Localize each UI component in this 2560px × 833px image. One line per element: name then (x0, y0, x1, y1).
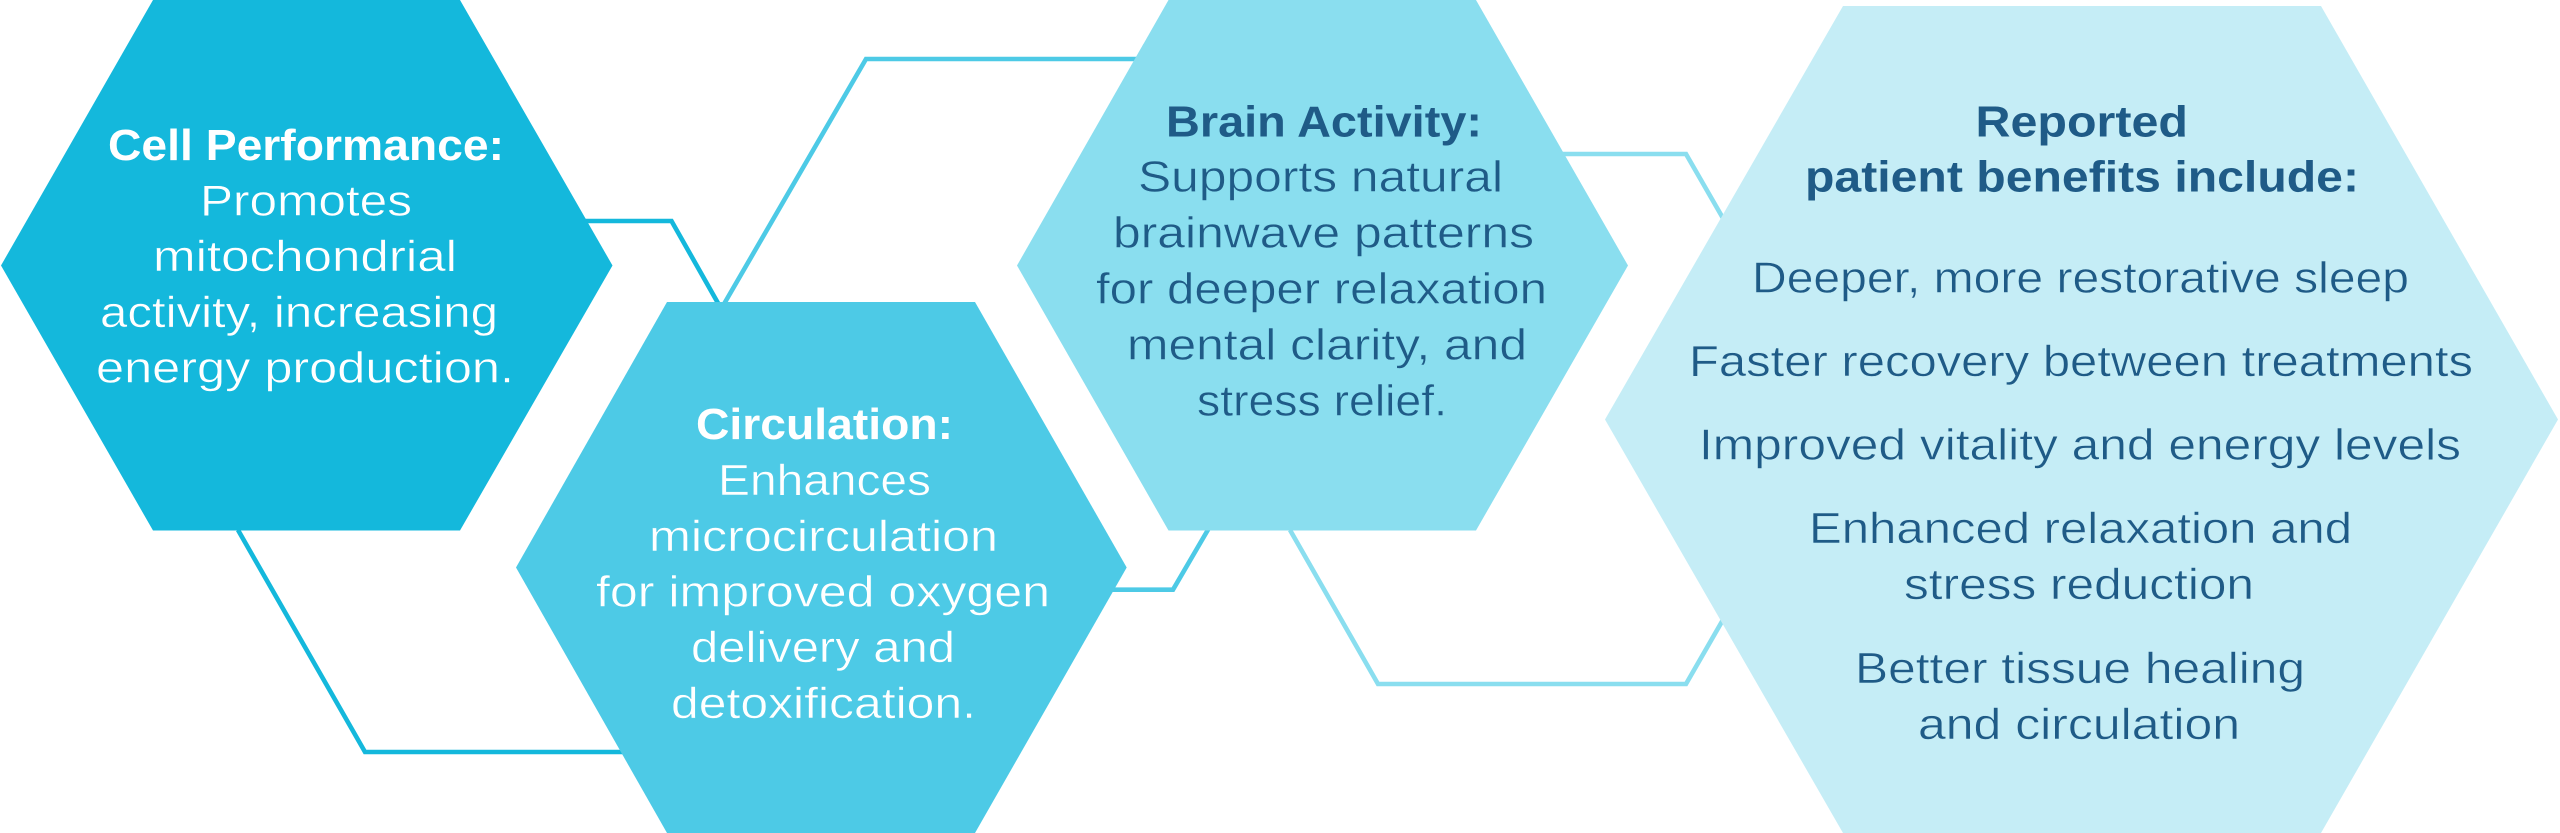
text block: circulation description (596, 457, 1050, 728)
heading: circulation: Circulation: (696, 401, 953, 449)
connector outline: cell performance (238, 221, 718, 752)
text block: brain activity description (1096, 154, 1547, 425)
connector outline: brain activity (1290, 154, 1724, 684)
text block: brain activity description: Supports natural (1138, 154, 1503, 202)
text block: cell performance description: mitochondrial (153, 233, 457, 281)
heading: cell performance: Cell Performance: (108, 122, 504, 170)
text block: cell performance description: energy production. (96, 344, 514, 392)
text block: circulation description: delivery and (691, 624, 955, 672)
text block: circulation description: Enhances (718, 457, 931, 505)
text block: cell performance description: activity, increasing (100, 289, 498, 337)
text block: cell performance description: Promotes (200, 178, 412, 226)
text block: brain activity description: stress relief. (1197, 377, 1447, 425)
benefit: healing: and circulation (1918, 701, 2240, 749)
benefit: relaxation: Enhanced relaxation and (1809, 505, 2352, 553)
benefit: recovery: Faster recovery between treatments (1689, 338, 2473, 386)
benefit: vitality: Improved vitality and energy levels (1699, 422, 2461, 470)
benefit: sleep: Deeper, more restorative sleep (1752, 254, 2409, 302)
heading: reported patient benefits (1805, 99, 2359, 202)
benefit: relaxation (1809, 505, 2352, 609)
text block: brain activity description: mental clarity, and (1127, 322, 1527, 370)
text block: cell performance description (96, 178, 514, 392)
text block: circulation description: microcirculation (649, 513, 998, 561)
panel: circulation (516, 302, 1127, 833)
panel: reported patient benefits (1605, 6, 2558, 833)
text block: circulation description: for improved oxygen (596, 569, 1050, 617)
text block: circulation description: detoxification. (671, 680, 976, 728)
panel: brain activity (1017, 0, 1628, 530)
heading: reported patient benefits: patient benefits include: (1805, 154, 2359, 202)
heading: brain activity: Brain Activity: (1166, 99, 1482, 147)
heading: reported patient benefits: Reported (1976, 99, 2188, 147)
benefit: healing (1855, 645, 2305, 749)
text block: brain activity description: brainwave patterns (1113, 210, 1534, 258)
benefit: relaxation: stress reduction (1904, 561, 2254, 609)
text block: brain activity description: for deeper relaxation (1096, 265, 1547, 313)
connector outline: circulation (724, 59, 1209, 590)
panel: cell performance (1, 0, 612, 530)
benefit: healing: Better tissue healing (1855, 645, 2305, 693)
